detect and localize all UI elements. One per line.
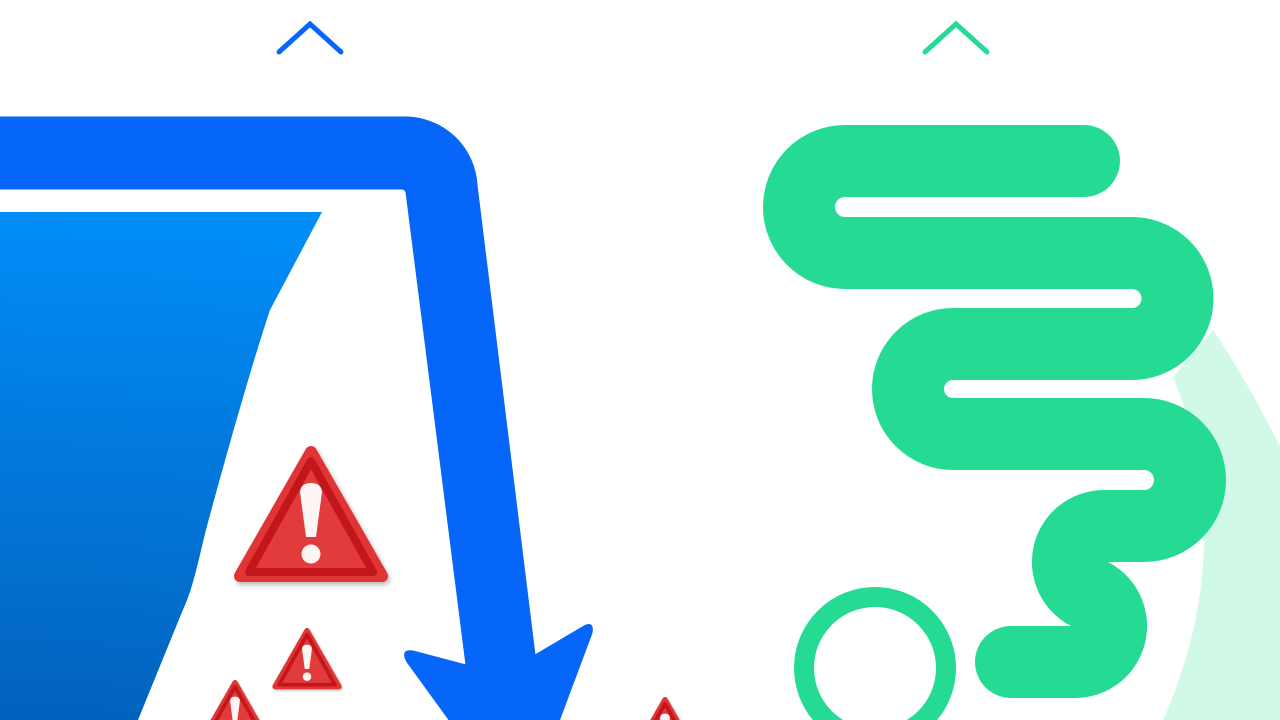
blue downward arrow line [0,117,592,720]
blue gradient descending area [0,212,322,720]
pale green arc band [1163,330,1280,720]
warning icon: right cut off [633,700,697,720]
warning icon: large [240,452,382,576]
icon: green chevron up [925,24,987,52]
warning icon: medium [275,631,339,686]
green winding intestine path [799,161,1190,662]
green ring [804,597,946,720]
warning icon: small cut off [203,683,267,720]
icon: blue chevron up [279,24,341,52]
